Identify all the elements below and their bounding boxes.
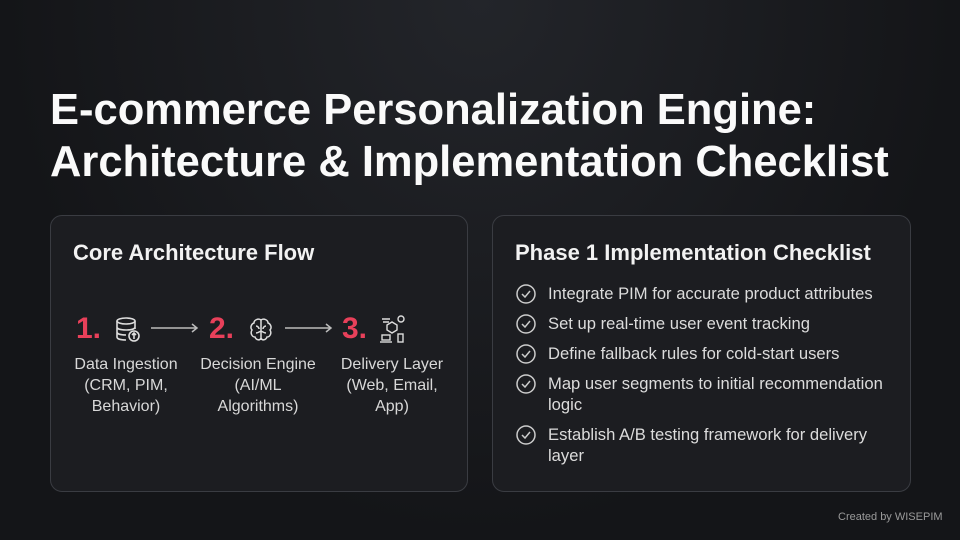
panel: core architecture flow [50,215,468,492]
label 1: Behavior) [92,398,160,415]
label 3: App) [375,398,409,415]
step 2 number: 2. [209,312,234,345]
item 2: Set up real-time user event tracking [548,314,810,333]
item 4 [516,374,883,414]
item 5: Establish A/B testing framework for delivery [548,425,867,444]
label 1: (CRM, PIM, [84,377,168,394]
label 1 [74,356,178,415]
icon: delivery [380,315,405,343]
item 3: Define fallback rules for cold-start users [548,344,839,363]
item 4: Map user segments to initial recommendation [548,374,883,393]
label 2: Algorithms) [218,398,298,415]
arrow 2 [285,324,332,332]
arrow 1 [151,324,198,332]
label 1: Data Ingestion [74,356,178,373]
label 2: (AI/ML [234,377,282,394]
panel: checklist: Phase 1 Implementation Checklist [515,240,871,265]
icon: database [116,317,140,342]
item 1: Integrate PIM for accurate product attributes [548,284,873,303]
title [50,86,889,186]
label 2 [200,356,316,415]
icon: brain [250,318,272,341]
footer credit: Created by WISEPIM [838,511,943,523]
title: E-commerce Personalization Engine: [50,86,816,134]
title: Architecture & Implementation Checklist [50,138,889,186]
item 5 [516,425,867,465]
label 3 [341,356,443,415]
step 1 number: 1. [76,312,101,345]
label 2: Decision Engine [200,356,316,373]
label 3: Delivery Layer [341,356,443,373]
panel: core architecture flow: Core Architecture Flow [73,240,314,265]
step 3 number: 3. [342,312,367,345]
item 4: logic [548,395,582,414]
label 3: (Web, Email, [346,377,438,394]
panel: checklist [492,215,911,492]
item 5: layer [548,446,584,465]
